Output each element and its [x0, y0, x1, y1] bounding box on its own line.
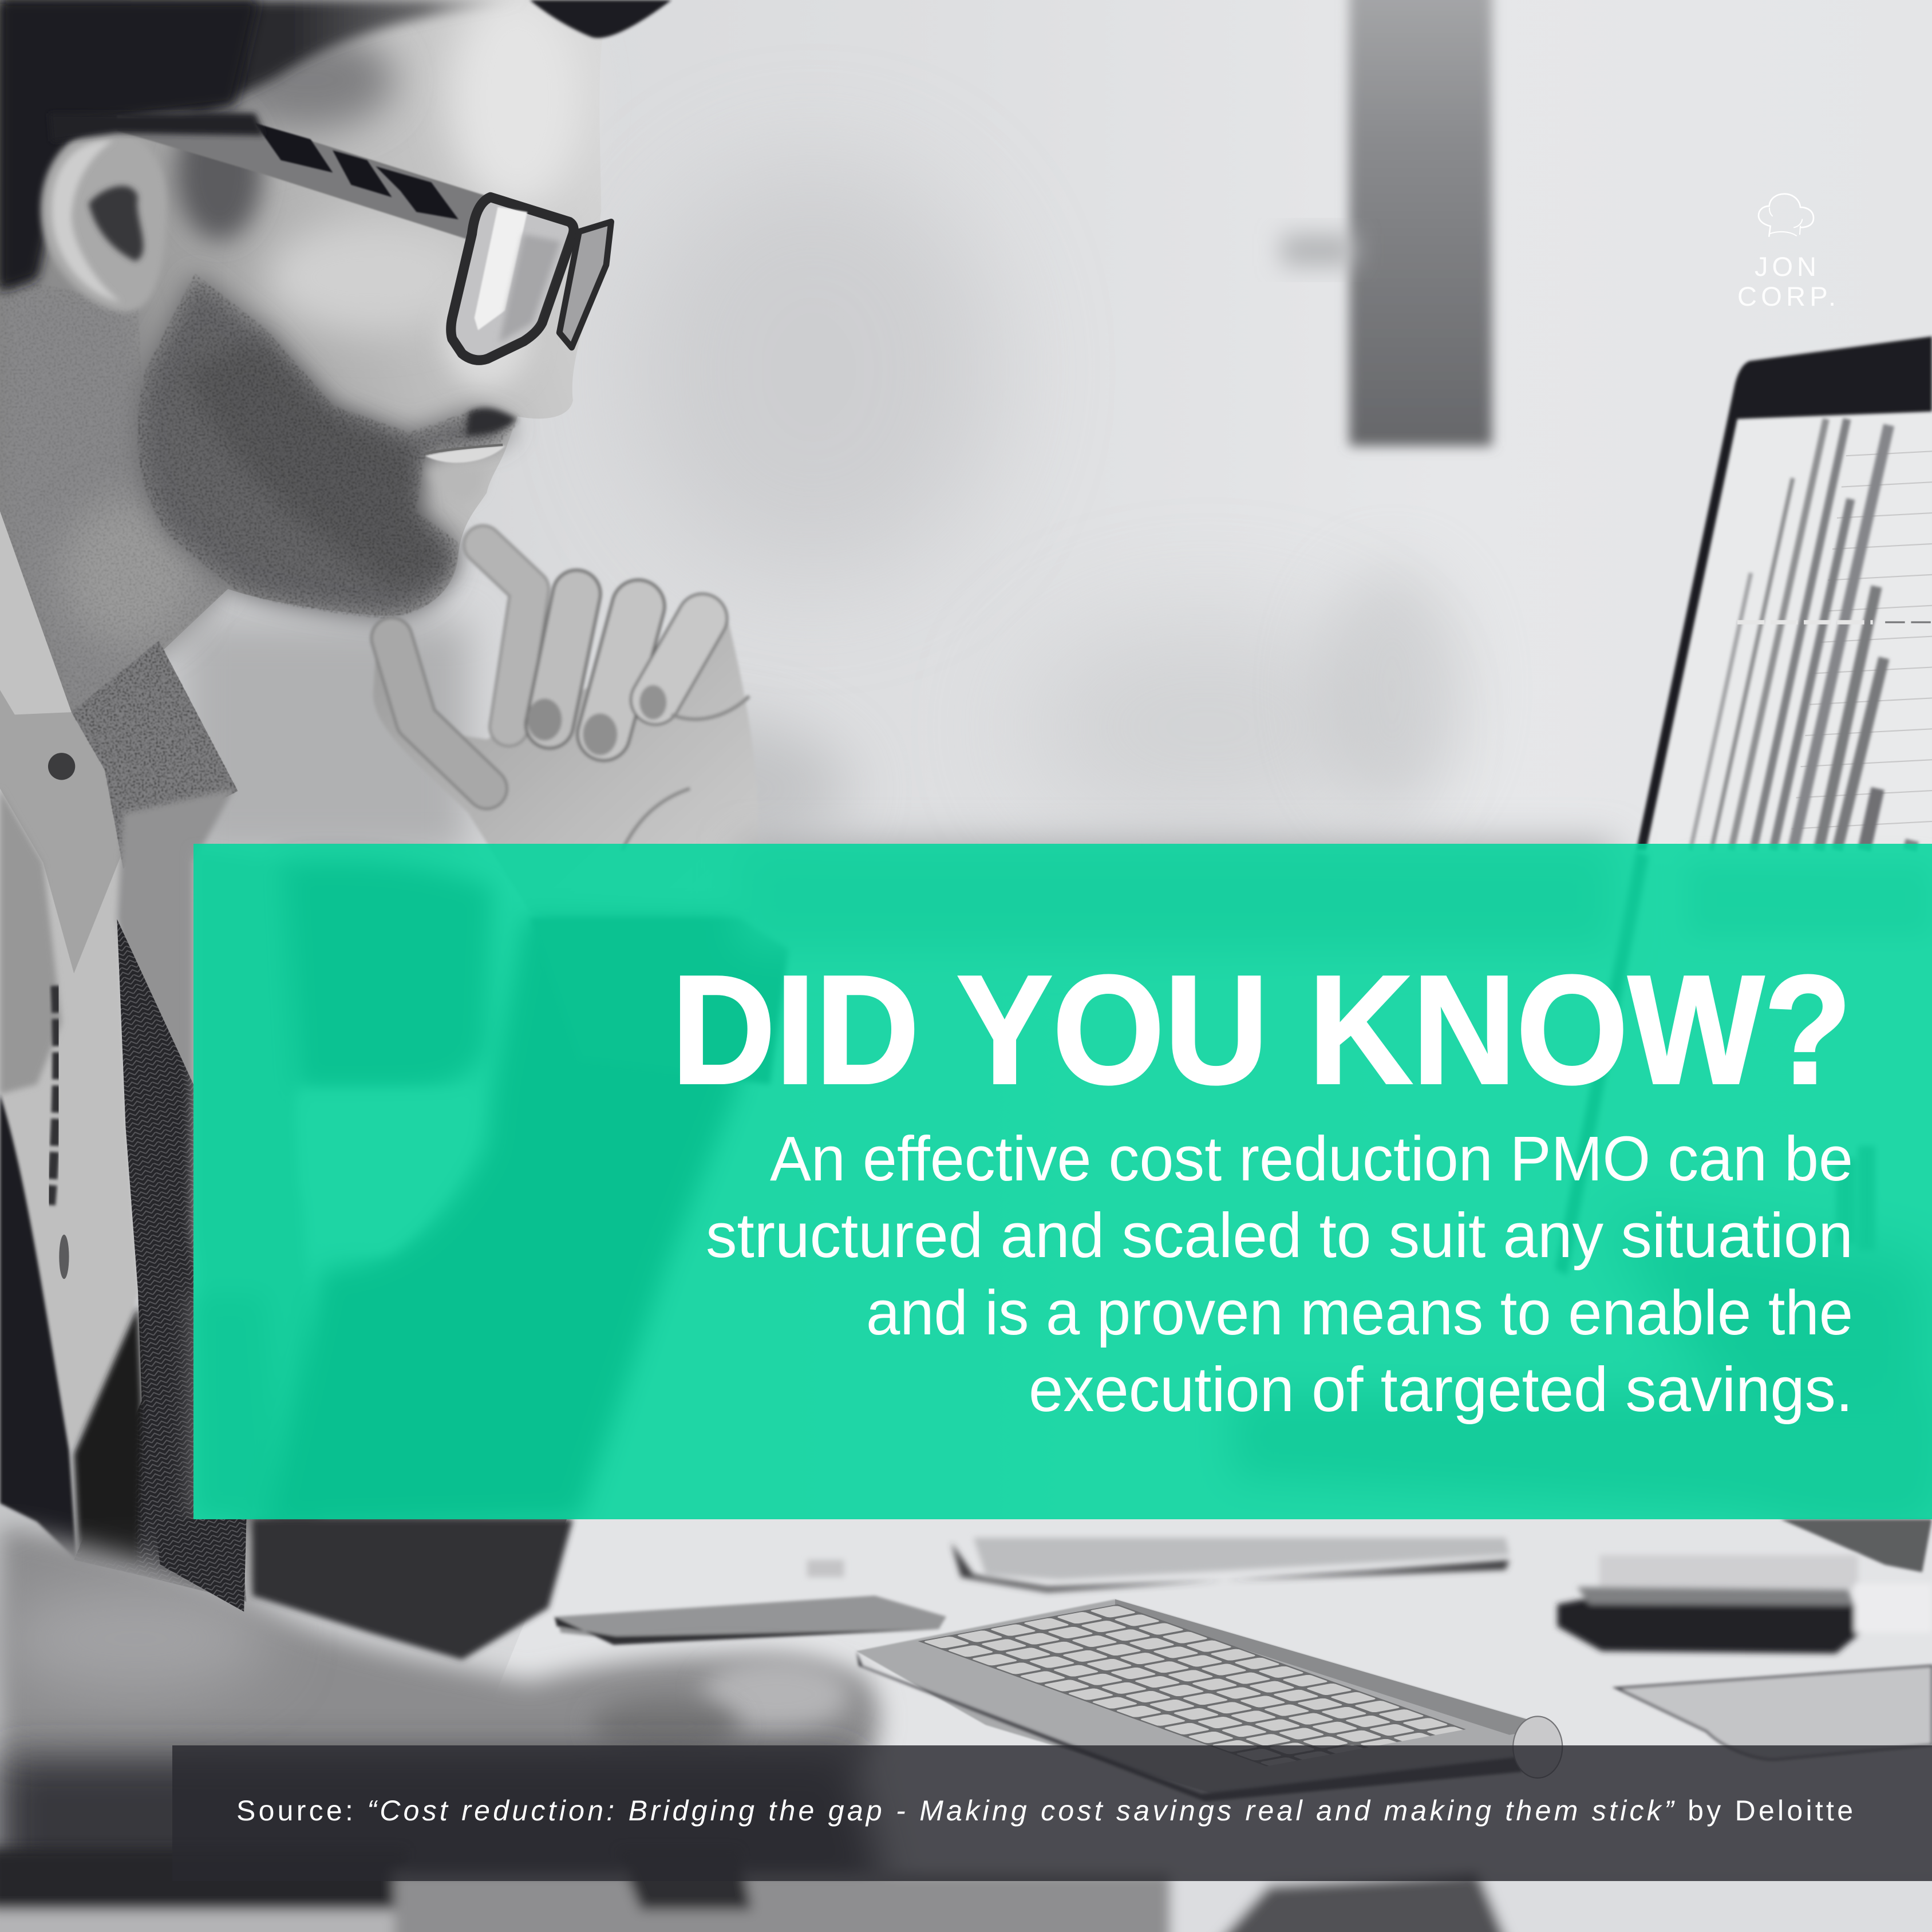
mouse pad — [1617, 1666, 1932, 1760]
denim shirt — [0, 511, 238, 1560]
logo wordmark: CORP. — [1737, 281, 1836, 311]
monitor — [1636, 337, 1932, 887]
logo wordmark — [1737, 251, 1836, 311]
dark source bar — [172, 1745, 1932, 1881]
monitor area under panel — [739, 844, 1932, 1519]
body text: and is a proven means to enable the — [866, 1278, 1853, 1348]
ear — [41, 129, 167, 312]
green panel — [193, 844, 1932, 1519]
herringbone jacket — [74, 789, 789, 1602]
monitor stand — [1780, 1519, 1932, 1572]
notebook on desk — [807, 1538, 1858, 1592]
desk surface — [394, 1519, 1932, 1932]
logo: Jon Corp — [1737, 194, 1836, 311]
logo wordmark: JON — [1755, 251, 1816, 282]
hand — [373, 544, 758, 973]
body text: structured and scaled to suit any situation — [706, 1200, 1853, 1271]
bottom foreground blur — [0, 1848, 1932, 1932]
hair — [0, 0, 671, 290]
head and neck — [0, 0, 610, 727]
phone — [555, 1595, 946, 1645]
body text — [706, 1124, 1853, 1425]
forearm and hand on keyboard — [0, 1519, 887, 1898]
source citation: Source: “Cost reduction: Bridging the gap - Making cost savings real and making them stick” by Deloitte — [236, 1795, 1853, 1827]
neck shading — [0, 277, 228, 727]
keyboard — [856, 1599, 1562, 1801]
glasses — [49, 113, 611, 360]
body text: execution of targeted savings. — [1029, 1354, 1853, 1425]
calculator — [1558, 1583, 1932, 1654]
icon: chef hat — [1759, 194, 1814, 236]
beard — [137, 274, 517, 619]
title: DID YOU KNOW? — [671, 944, 1852, 1116]
body text: An effective cost reduction PMO can be — [770, 1124, 1853, 1194]
